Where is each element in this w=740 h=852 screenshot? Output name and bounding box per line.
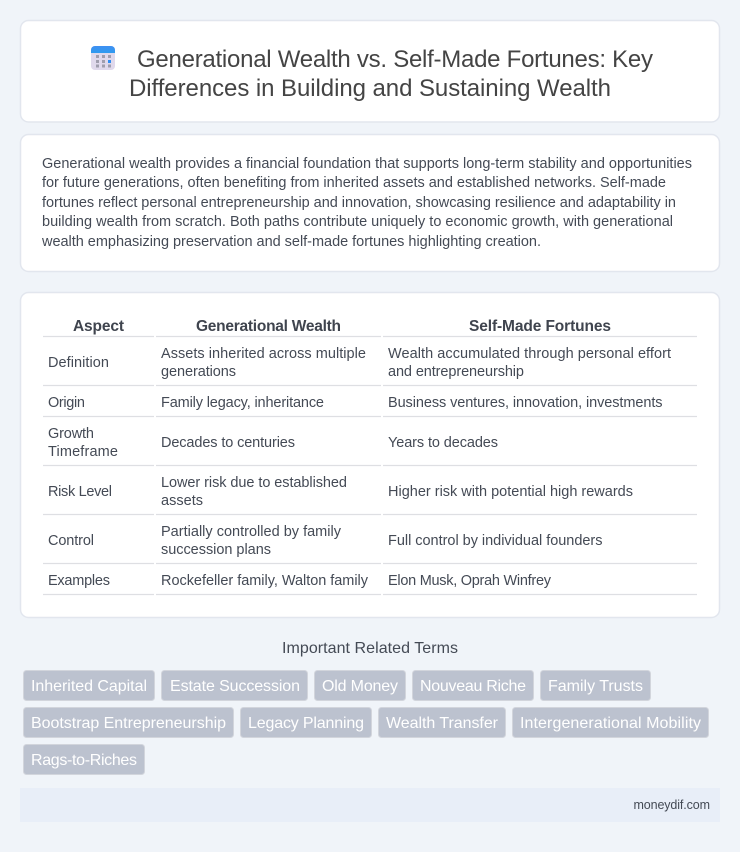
intro text: Generational wealth provides a financial foundation that supports long-term stability and opportunities [42,156,692,172]
row: definition: Definition [48,355,109,371]
pill: Bootstrap Entrepreneurship [24,708,234,738]
intro text [41,156,692,250]
row: control: Partially controlled by family [161,524,342,540]
pill: Nouveau Riche [412,670,534,700]
row: origin [48,395,662,411]
table header: Aspect [73,318,124,335]
row: examples [48,573,552,589]
pill: Nouveau Riche: Nouveau Riche [420,678,526,695]
row: origin: Origin [48,395,85,411]
row: control: Control [48,533,94,549]
row: origin: Family legacy, inheritance [161,395,324,411]
intro text: fortunes reflect personal entrepreneurship and innovation, showcasing resilience and adaptability in [42,195,676,211]
table header: Self-Made Fortunes [469,318,611,335]
pill: Estate Succession [162,670,308,700]
row: examples: Rockefeller family, Walton family [161,573,369,589]
title: Generational Wealth vs. Self-Made Fortunes: Key [137,46,653,73]
row: origin: Business ventures, innovation, investments [388,395,662,411]
icon: calendar [91,46,115,70]
pill: Old Money: Old Money [322,678,398,695]
heading: related terms: Important Related Terms [282,640,458,657]
pill: Wealth Transfer [378,708,506,738]
row: examples: Elon Musk, Oprah Winfrey [388,573,552,589]
pill: Wealth Transfer: Wealth Transfer [386,715,499,732]
row: definition: Wealth accumulated through personal effort [388,346,671,362]
row: risk level: Higher risk with potential high rewards [388,484,633,500]
row: risk level [48,475,633,509]
title [129,46,653,102]
row: growth timeframe: Timeframe [48,444,118,460]
pill: Bootstrap Entrepreneurship: Bootstrap Entrepreneurship [31,715,226,732]
pill: Rags-to-Riches: Rags-to-Riches [31,752,137,769]
row: examples: Examples [48,573,110,589]
row: definition [48,346,671,380]
row: growth timeframe: Decades to centuries [161,435,295,451]
pill: Legacy Planning: Legacy Planning [248,715,364,732]
row: risk level: Risk Level [48,484,112,500]
pill: Estate Succession: Estate Succession [170,678,300,695]
pill: Intergenerational Mobility: Intergenerational Mobility [520,715,701,732]
pill: Inherited Capital [24,670,154,700]
pill: Inherited Capital: Inherited Capital [31,678,147,695]
intro text: for future generations, often benefiting from inherited assets and established networks. Self-made [42,175,666,191]
pill: Legacy Planning [240,708,372,738]
footer [20,788,720,822]
pill: Family Trusts [540,670,650,700]
row: definition: Assets inherited across multiple [161,346,366,362]
table header: Generational Wealth [196,318,341,335]
row: definition: and entrepreneurship [388,364,524,380]
intro text: building wealth from scratch. Both paths contribute uniquely to economic growth, with generational [42,214,673,230]
panel: title header [20,20,720,122]
table header [73,318,611,335]
row: control [48,524,602,558]
row: definition: generations [161,364,236,380]
pill: Intergenerational Mobility [512,708,708,738]
panel: comparison table [20,292,720,618]
row: growth timeframe [48,426,498,460]
row: risk level: assets [161,493,203,509]
pill: Old Money [314,670,406,700]
pill: Family Trusts: Family Trusts [548,678,643,695]
row: risk level: Lower risk due to established [161,475,347,491]
pill: Rags-to-Riches [24,744,144,774]
intro text: wealth emphasizing preservation and self-made fortunes highlighting creation. [41,234,541,250]
footer: moneydif.com [634,798,710,812]
title: Differences in Building and Sustaining Wealth [129,75,611,102]
row: control: Full control by individual founders [388,533,602,549]
panel: introduction [20,134,720,272]
related term pills [24,670,708,774]
row: growth timeframe: Years to decades [388,435,498,451]
row: growth timeframe: Growth [48,426,94,442]
row: control: succession plans [161,542,271,558]
